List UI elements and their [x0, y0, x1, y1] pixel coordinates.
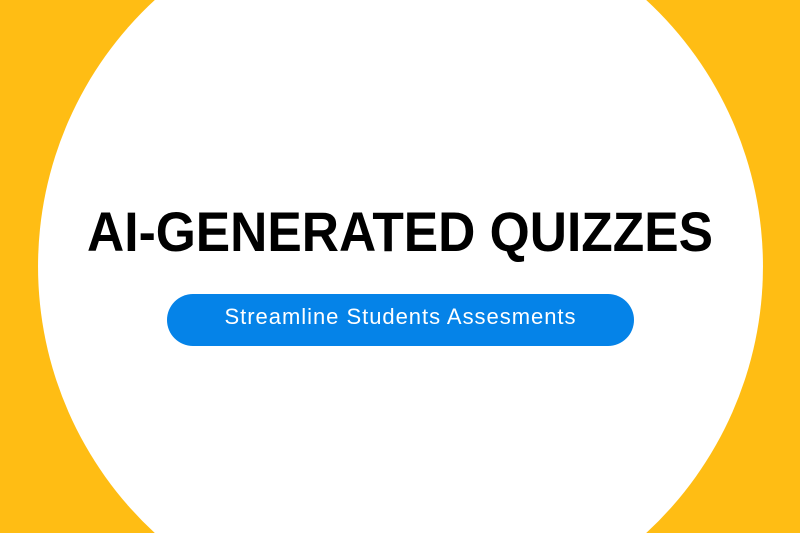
subtitle pill	[167, 294, 634, 346]
subtitle pill: Streamline Students Assesments	[225, 304, 576, 329]
title: AI-GENERATED QUIZZES	[87, 200, 713, 263]
